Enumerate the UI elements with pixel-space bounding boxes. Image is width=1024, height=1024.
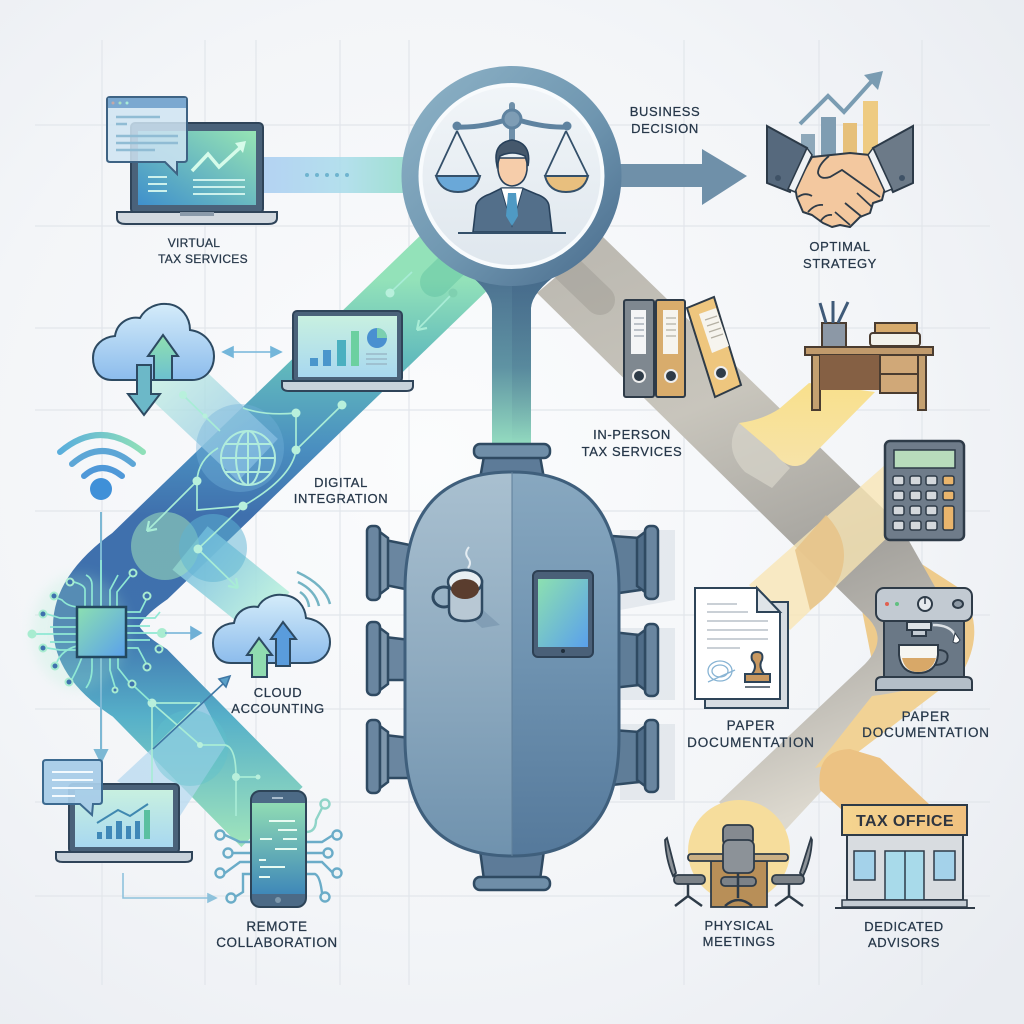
conference table <box>367 444 675 890</box>
label: remote collaboration: COLLABORATION <box>216 935 338 950</box>
label: physical meetings: PHYSICAL <box>704 918 774 933</box>
yellow overlap shapes <box>688 383 890 902</box>
table shadow <box>620 530 675 800</box>
icon: document <box>695 588 788 708</box>
icon: coffee machine <box>876 588 972 690</box>
icon: upload cloud <box>93 304 214 415</box>
table caps <box>474 444 550 890</box>
icon: virtual laptop <box>107 97 277 224</box>
icon: binders <box>624 297 741 397</box>
label: dedicated advisors <box>864 919 944 950</box>
icon: cloud accounting <box>213 572 330 677</box>
icon: coffee cup <box>433 547 500 628</box>
digital ribbon <box>96 228 490 817</box>
icon: analytics laptop <box>282 311 413 391</box>
label: optimal strategy: OPTIMAL <box>809 239 871 254</box>
light crossing ribbons <box>117 238 480 816</box>
network lines on ribbon <box>147 272 458 816</box>
label: cloud accounting: CLOUD <box>254 685 302 700</box>
label: digital integration: DIGITAL <box>314 475 368 490</box>
label: business decision <box>630 104 700 136</box>
connector band: virtual to scale <box>263 157 413 193</box>
speech bubble <box>107 97 187 174</box>
icon: wifi <box>60 435 143 500</box>
arrow: business decision <box>610 149 747 205</box>
right chairs <box>612 526 658 792</box>
arrow: diagonal to cloud <box>153 676 230 749</box>
label: in-person tax services: IN-PERSON <box>593 427 671 442</box>
label: physical meetings <box>703 918 775 949</box>
label: optimal strategy <box>803 239 877 271</box>
label: optimal strategy: STRATEGY <box>803 256 877 271</box>
in-person grey ribbon <box>537 237 965 852</box>
icon: globe <box>221 431 275 485</box>
label: virtual tax services <box>158 236 248 266</box>
gold ribbon front <box>815 673 962 810</box>
label: in-person tax services <box>582 427 682 459</box>
label: dedicated advisors: DEDICATED <box>864 919 944 934</box>
speech bubble <box>43 760 102 815</box>
left chairs <box>367 526 410 793</box>
icon: tax office: TAX OFFICE <box>856 813 954 830</box>
arrow: laptop to phone <box>123 873 216 902</box>
label: paper documentation <box>687 718 815 750</box>
label: digital integration: INTEGRATION <box>294 491 388 506</box>
label: remote collaboration <box>216 919 338 950</box>
label: paper documentation: DOCUMENTATION <box>687 735 815 750</box>
icon: tablet <box>533 571 593 657</box>
label: in-person tax services: TAX SERVICES <box>582 444 682 459</box>
icon: meeting room <box>665 825 812 907</box>
label: business decision: DECISION <box>631 121 699 136</box>
icon: handshake and chart <box>767 71 913 227</box>
in-person gold ribbon back <box>860 528 974 702</box>
label: dedicated advisors: ADVISORS <box>868 935 940 950</box>
label: paper documentation: DOCUMENTATION <box>862 725 990 740</box>
stem connecting table and scale <box>466 272 560 445</box>
icon: advisor <box>473 140 552 232</box>
icon: desk <box>805 301 933 410</box>
label: virtual tax services: VIRTUAL <box>168 236 220 250</box>
label: paper documentation: PAPER <box>727 718 775 733</box>
label: remote collaboration: REMOTE <box>246 919 308 934</box>
icon: calculator <box>885 441 964 540</box>
arrow: chip to cloud <box>165 627 201 639</box>
label: cloud accounting <box>231 685 325 716</box>
icon: processor chip <box>28 560 167 701</box>
label: paper documentation: PAPER <box>902 709 950 724</box>
icon: scales of justice <box>436 102 588 192</box>
icon: tax office <box>835 805 975 908</box>
icon: remote laptop <box>43 760 192 862</box>
icon: phone with circuits <box>216 791 342 907</box>
label: business decision: BUSINESS <box>630 104 700 119</box>
label: paper documentation <box>862 709 990 740</box>
arrow: double <box>223 347 281 357</box>
arrow: wifi to laptop <box>95 512 107 762</box>
label: digital integration <box>294 475 388 506</box>
label: cloud accounting: ACCOUNTING <box>231 701 325 716</box>
label: physical meetings: MEETINGS <box>703 934 775 949</box>
label: virtual tax services: TAX SERVICES <box>158 252 248 266</box>
scale circle <box>402 66 622 286</box>
